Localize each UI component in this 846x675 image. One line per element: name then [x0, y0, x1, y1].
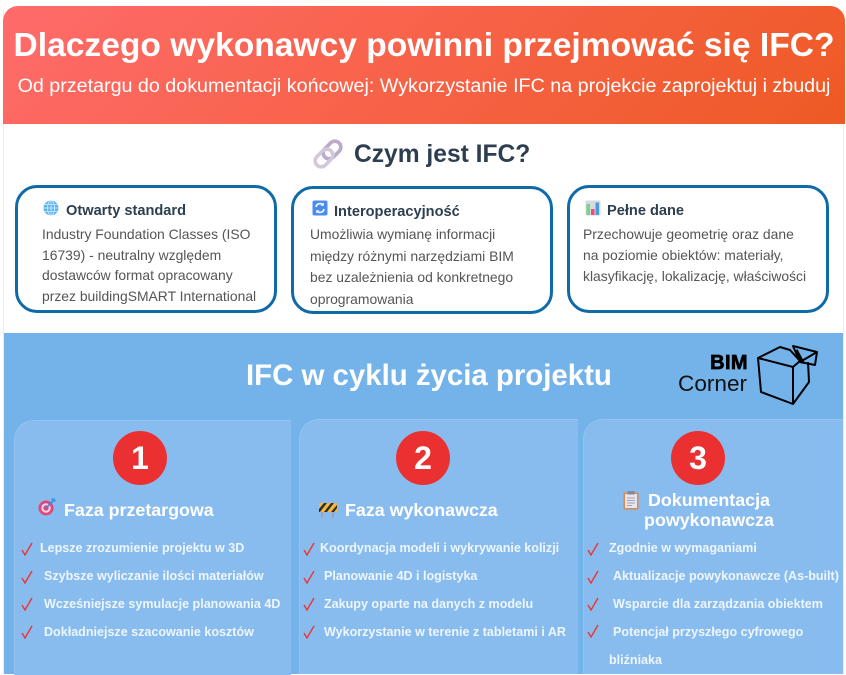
heading text: [644, 490, 774, 530]
card text: klasyfikację, lokalizację, właściwości: [583, 268, 806, 284]
card text: [42, 226, 256, 304]
item: [588, 570, 598, 584]
panel: phase 1: [14, 420, 291, 675]
item text: Lepsze zrozumienie projektu w 3D: [40, 541, 244, 555]
icon: barrier: [319, 503, 337, 518]
item text: Wcześniejsze symulacje planowania 4D: [44, 597, 280, 611]
icon: sync arrows: [312, 200, 328, 216]
icon: clipboard: [624, 491, 638, 510]
heading text: powykonawcza: [644, 510, 774, 530]
card text: Umożliwia wymianę informacji: [310, 226, 495, 242]
item text: Aktualizacje powykonawcze (As-built): [613, 569, 839, 583]
logo box icon: [757, 345, 818, 405]
number badge 1: [113, 431, 167, 485]
item text: Wykorzystanie w terenie z tabletami i AR: [324, 625, 566, 639]
item: [588, 542, 598, 556]
card heading: Pełne dane: [607, 203, 684, 219]
card text: na poziomie obiektów: materiały,: [583, 247, 783, 263]
card text: [310, 226, 514, 307]
card heading: Otwarty standard: [66, 203, 186, 219]
card heading: Interoperacyjność: [334, 204, 460, 220]
heading text: Faza przetargowa: [64, 500, 214, 520]
heading text: Dokumentacja: [648, 490, 770, 510]
header banner: [3, 6, 845, 124]
section heading: IFC w cyklu życia projektu: [246, 359, 612, 392]
card text: 16739) - neutralny względem: [42, 247, 221, 263]
item: [22, 598, 32, 611]
phase heading: [319, 500, 498, 520]
item text: Zgodnie w wymaganiami: [609, 541, 757, 555]
icon: bar chart: [586, 200, 600, 216]
card text: Industry Foundation Classes (ISO: [42, 226, 250, 242]
number badge 3: 3: [689, 440, 707, 476]
section heading: Czym jest IFC: [313, 139, 530, 169]
card text: [583, 226, 806, 284]
heading text: Czym jest IFC?: [354, 141, 530, 168]
item: [304, 570, 314, 584]
item text: Szybsze wyliczanie ilości materiałów: [44, 569, 264, 583]
card text: Przechowuje geometrię oraz dane: [583, 226, 794, 242]
item: [304, 626, 314, 639]
item text: Planowanie 4D i logistyka: [324, 569, 477, 583]
item text: Koordynacja modeli i wykrywanie kolizji: [320, 541, 559, 555]
phase heading: [624, 490, 774, 530]
section: IFC lifecycle: [4, 333, 843, 674]
item: [588, 598, 598, 611]
card: Interoperacyjność: [291, 186, 553, 314]
card: Pełne dane: [567, 185, 829, 313]
logo: BIM Corner: [678, 345, 818, 405]
logo text Corner: Corner: [678, 371, 747, 396]
card text: bez uzależnienia od konkretnego: [310, 269, 513, 285]
card text: przez buildingSMART International: [42, 288, 256, 304]
icon: chain link: [313, 139, 343, 169]
item text: Wsparcie dla zarządzania obiektem: [613, 597, 823, 611]
heading text: Faza wykonawcza: [345, 500, 498, 520]
item: [304, 542, 314, 556]
check list: [588, 541, 839, 667]
number badge 3: [671, 431, 725, 485]
subtitle: Od przetargu do dokumentacji końcowej: Wykorzystanie IFC na projekcie zaprojektuj i zbuduj: [18, 75, 830, 97]
item: [22, 626, 32, 639]
number badge 1: 1: [131, 440, 149, 476]
item text: Zakupy oparte na danych z modelu: [324, 597, 533, 611]
panel: phase 2: [299, 419, 578, 674]
card text: między różnymi narzędziami BIM: [310, 248, 514, 264]
item: [588, 624, 598, 638]
item text: Dokładniejsze szacowanie kosztów: [44, 625, 254, 639]
phase heading: [38, 498, 214, 520]
title: Dlaczego wykonawcy powinni przejmować się IFC?: [14, 27, 834, 64]
check list: [304, 541, 566, 639]
item text continuation: bliźniaka: [609, 653, 662, 667]
icon: target: [38, 498, 56, 516]
number badge 2: 2: [414, 440, 432, 476]
panel: phase 3: [583, 419, 843, 674]
card text: oprogramowania: [310, 291, 413, 307]
item: [304, 598, 314, 611]
check list: [22, 541, 280, 639]
number badge 2: [396, 431, 450, 485]
item: [22, 542, 32, 556]
item text: Potencjał przyszłego cyfrowego: [613, 625, 803, 639]
logo text BIM: BIM: [710, 352, 748, 374]
icon: globe: [44, 200, 58, 216]
item: [22, 570, 32, 584]
card text: dostawców format opracowany: [42, 267, 233, 283]
card: Otwarty standard: [15, 185, 277, 313]
